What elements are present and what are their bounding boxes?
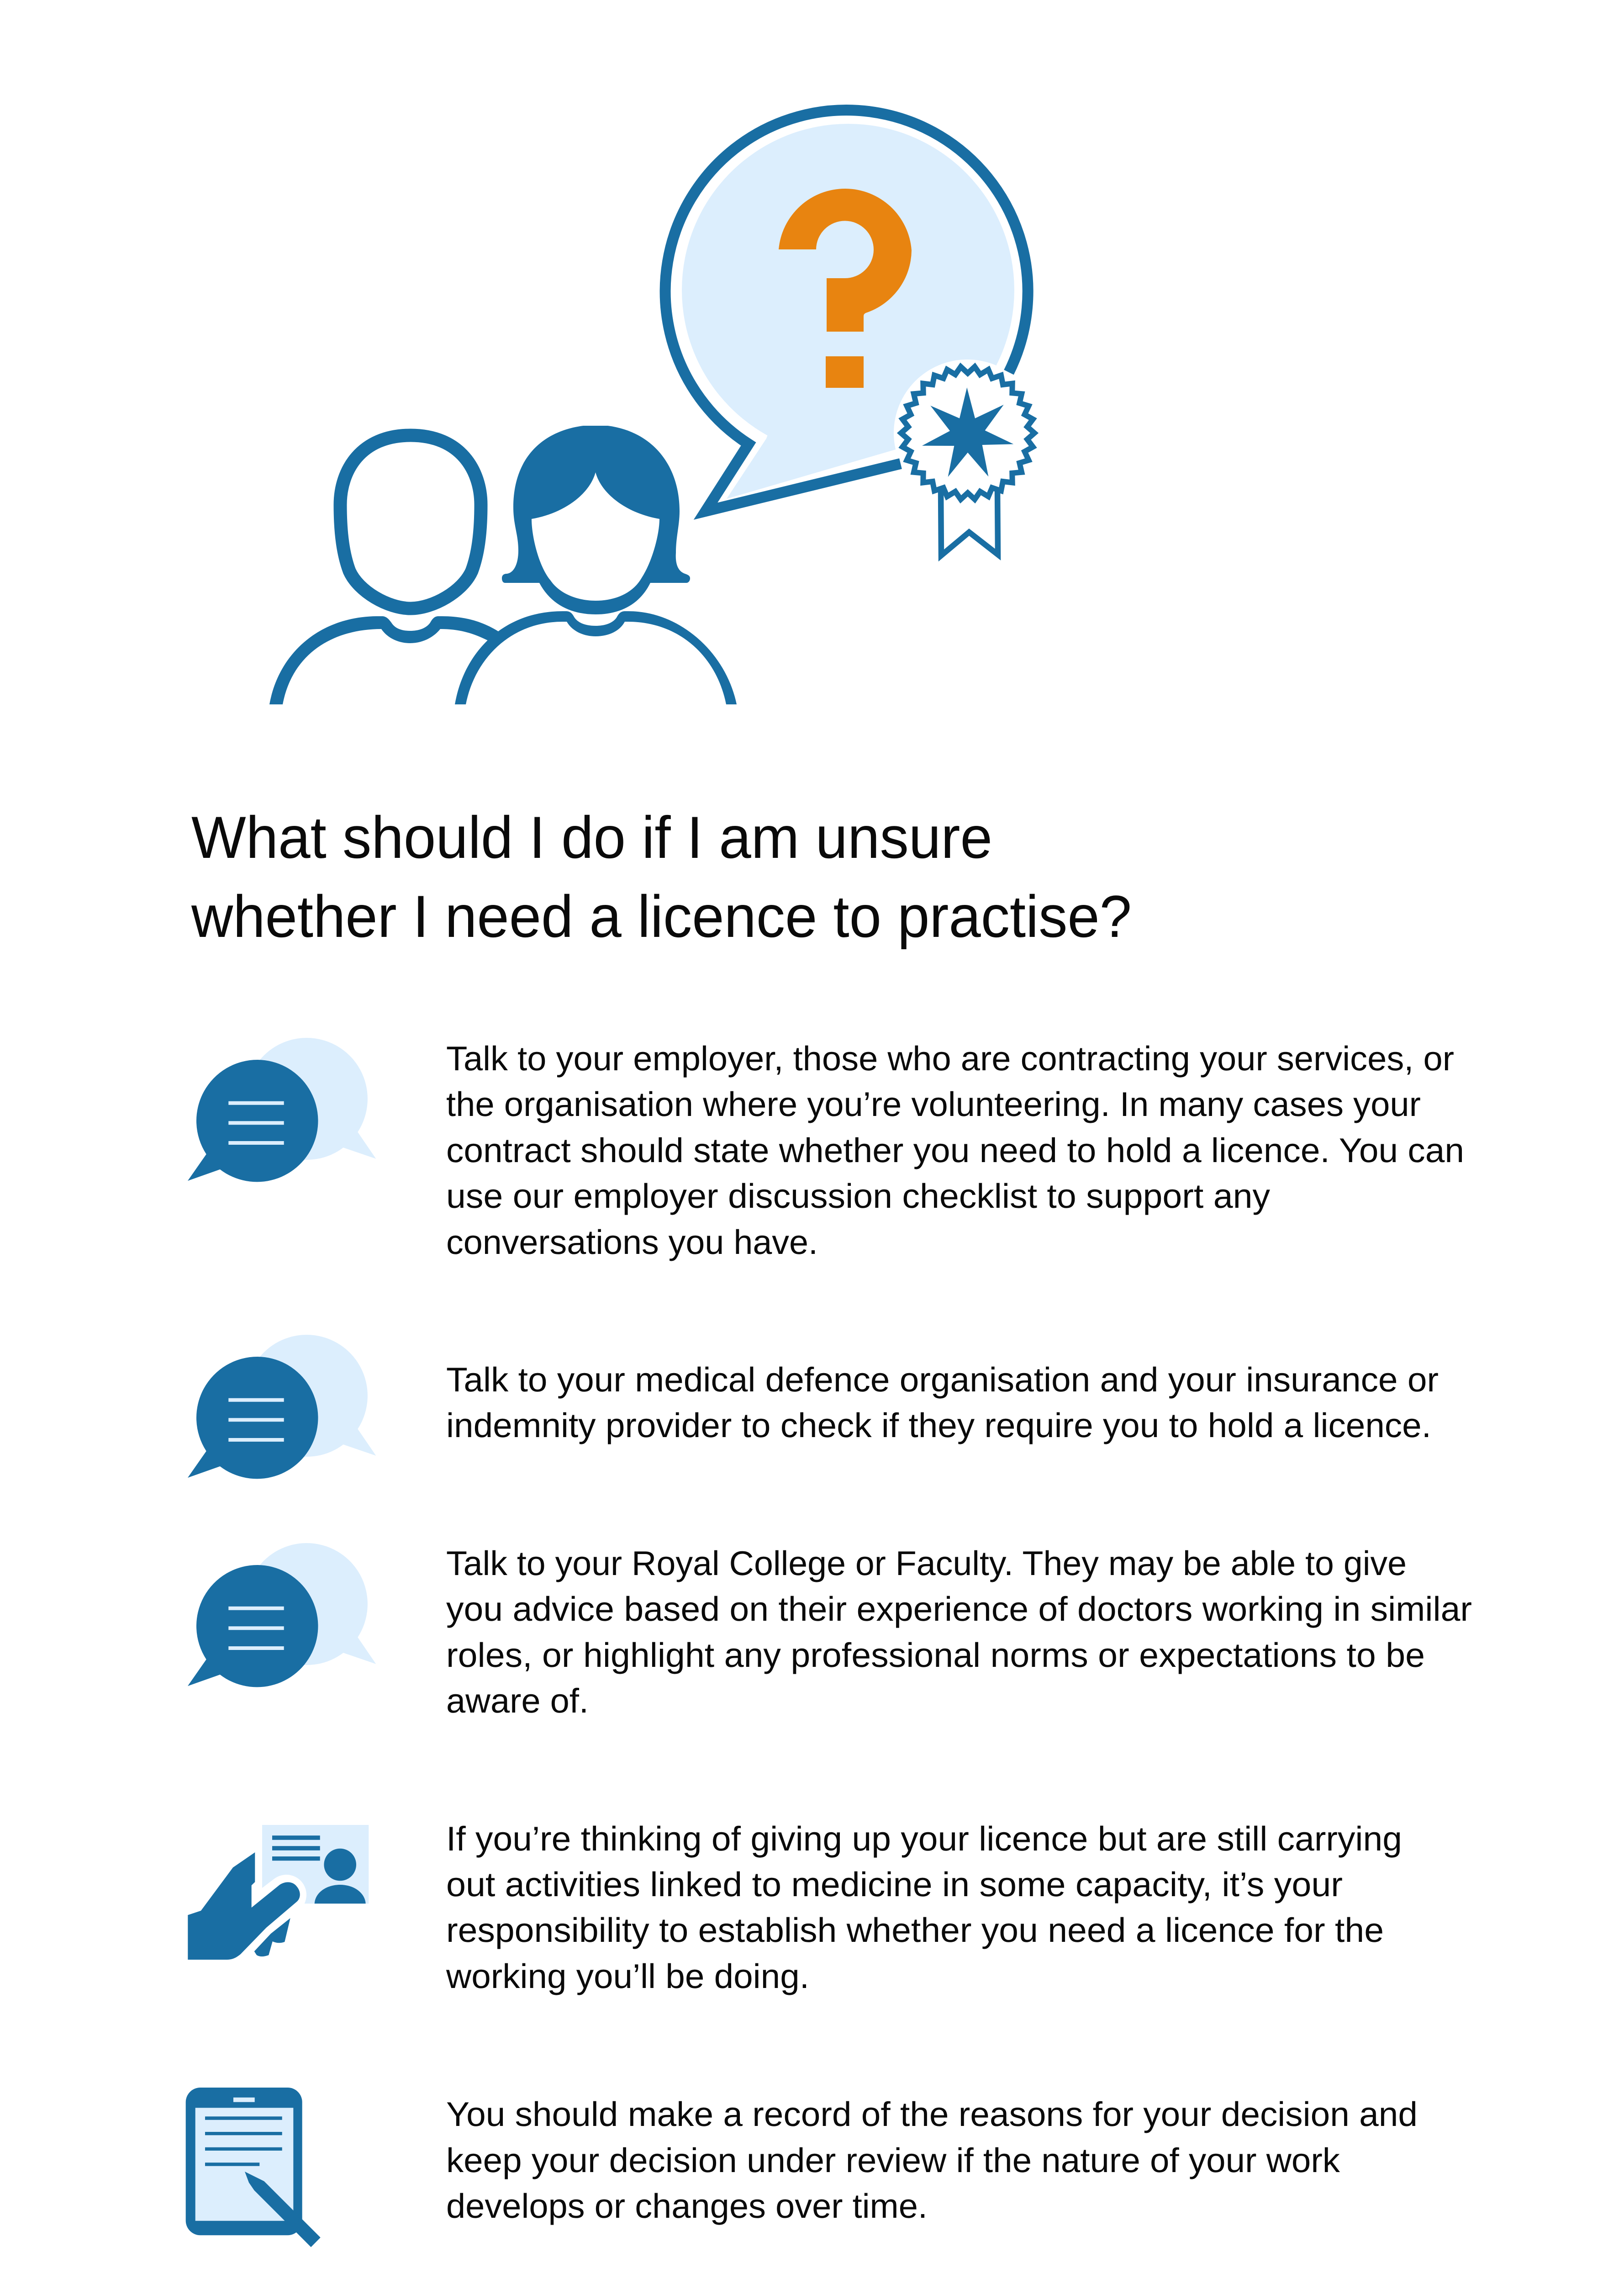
text: royal college or faculty: Talk to your Royal College or Faculty. They may be able to give	[446, 1544, 1407, 1582]
pen	[245, 2172, 321, 2247]
ID card text lines	[272, 1835, 320, 1861]
text: talk to your employer: Talk to your employer, those who are contracting your services, or	[446, 1039, 1454, 1078]
icon: woman face	[532, 472, 659, 601]
tablet text lines	[205, 2116, 282, 2166]
text: make a record: keep your decision under review if the nature of your work	[446, 2141, 1340, 2179]
ID card	[262, 1825, 369, 1903]
text: make a record: develops or changes over time.	[446, 2187, 928, 2225]
text: giving up your licence: working you’ll be doing.	[446, 1957, 809, 1995]
rosette star	[922, 387, 1013, 477]
text: giving up your licence: responsibility to establish whether you need a licence for the	[446, 1911, 1384, 1949]
text: giving up your licence	[446, 1819, 1402, 1995]
white halo around finger	[244, 1895, 286, 1927]
text: giving up your licence: If you’re thinking of giving up your licence but are still carrying	[446, 1819, 1402, 1858]
text: royal college or faculty: aware of.	[446, 1681, 589, 1720]
question mark	[779, 189, 912, 388]
speech bubble light fill	[682, 124, 1014, 499]
title	[191, 804, 1132, 950]
hand	[188, 1852, 300, 1960]
lower fingers	[254, 1918, 290, 1956]
text: royal college or faculty	[446, 1544, 1472, 1720]
text: talk to your employer: conversations you have.	[446, 1223, 818, 1261]
icon: speech bubbles, row 3	[188, 1543, 376, 1687]
tablet screen	[195, 2108, 293, 2221]
icon: speech bubbles, row 1	[188, 1038, 376, 1182]
icon: hand holding ID card	[188, 1825, 369, 1960]
tablet body	[186, 2088, 302, 2235]
tablet slot	[233, 2098, 255, 2102]
speech bubble outline	[665, 110, 1028, 511]
text: talk to your employer: the organisation where you’re volunteering. In many cases your	[446, 1085, 1421, 1123]
text: medical defence organisation: indemnity provider to check if they require you to hold a licence.	[446, 1406, 1431, 1444]
icon: man head outline	[340, 435, 481, 608]
text: royal college or faculty: roles, or highlight any professional norms or expectations to be	[446, 1636, 1425, 1674]
text: giving up your licence: out activities linked to medicine in some capacity, it’s your	[446, 1865, 1343, 1903]
text: make a record	[446, 2095, 1418, 2225]
icon: speech bubbles, row 2	[188, 1335, 376, 1479]
icon: woman hair and head	[502, 426, 690, 614]
hero illustration: two people, speech bubble and rosette	[269, 110, 1041, 704]
rosette badge	[901, 367, 1034, 499]
text: medical defence organisation	[446, 1360, 1439, 1444]
rosette ribbon	[941, 489, 998, 555]
icon: man shoulders	[269, 616, 500, 704]
title: What should I do if I am unsure	[191, 804, 992, 871]
text: make a record: You should make a record of the reasons for your decision and	[446, 2095, 1418, 2133]
text: royal college or faculty: you advice based on their experience of doctors working in similar	[446, 1590, 1472, 1628]
text: talk to your employer: contract should state whether you need to hold a licence. You can	[446, 1131, 1464, 1169]
white halo behind rosette	[894, 360, 1041, 507]
text: talk to your employer	[446, 1039, 1464, 1261]
ID card portrait	[315, 1849, 366, 1903]
text: medical defence organisation: Talk to your medical defence organisation and your insurance or	[446, 1360, 1439, 1399]
title: whether I need a licence to practise?	[191, 883, 1132, 950]
icon: tablet with pen	[186, 2088, 321, 2247]
icon: woman shoulders	[455, 611, 737, 704]
text: talk to your employer: use our employer discussion checklist to support any	[446, 1177, 1271, 1215]
